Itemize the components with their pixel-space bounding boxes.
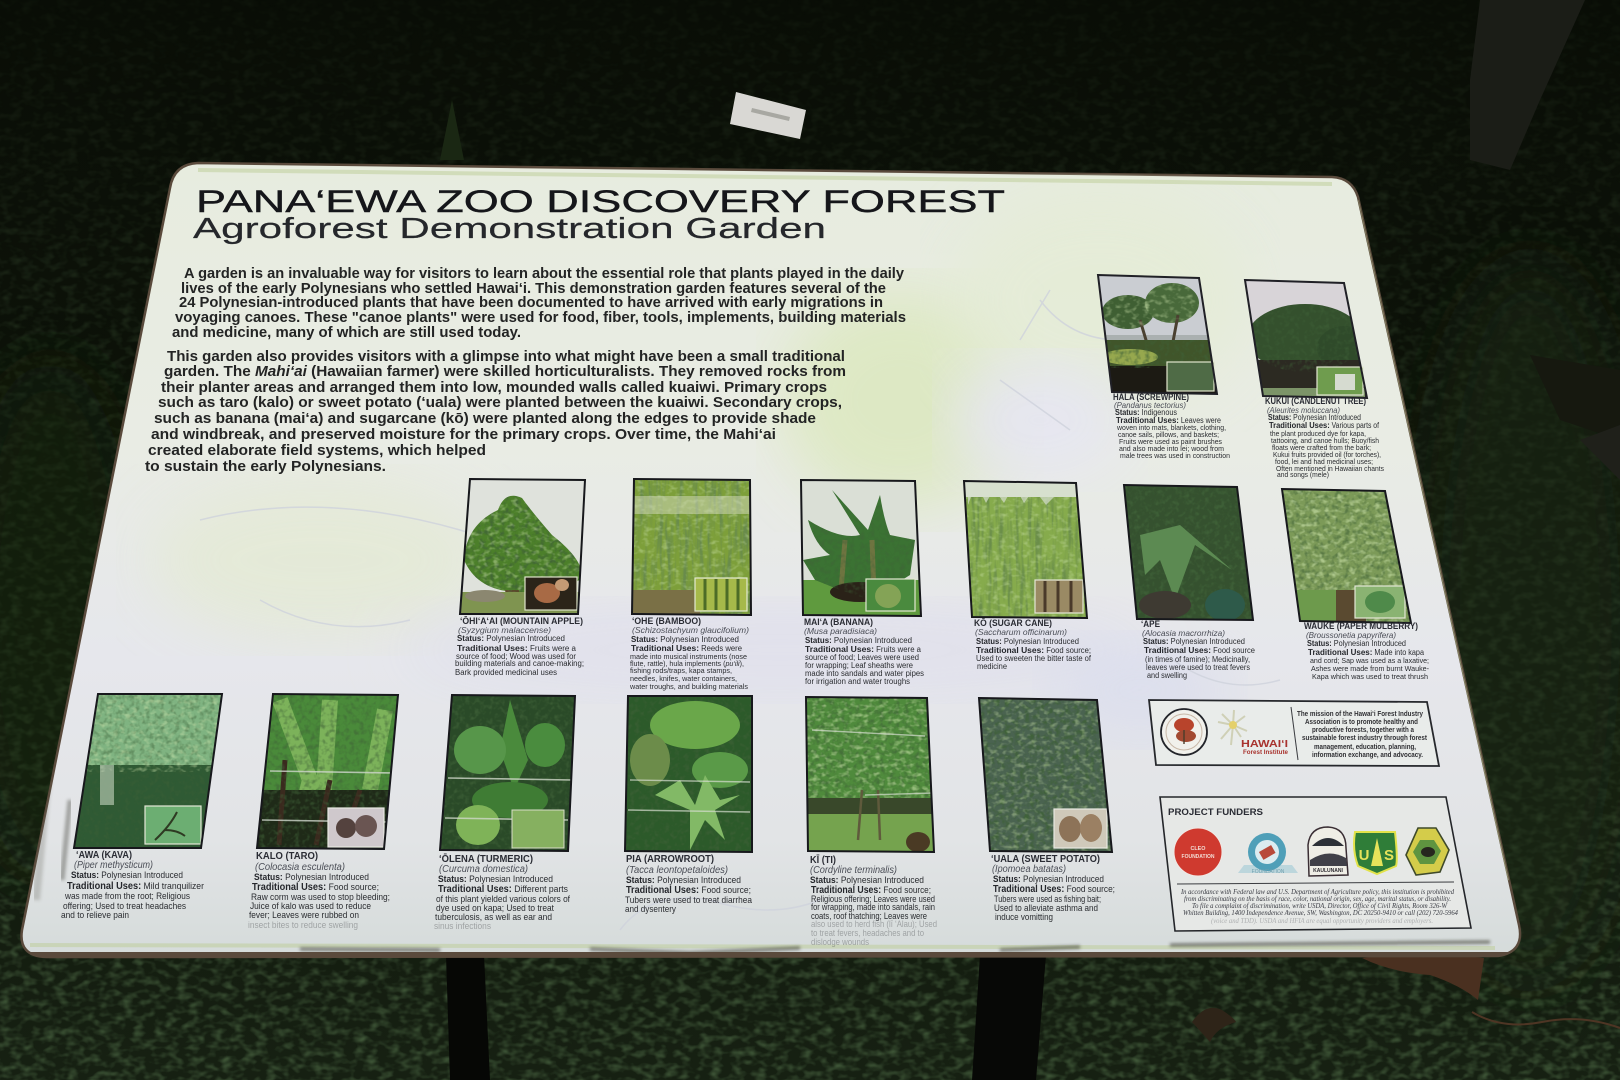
label: maia: for irrigation and water troughs [805, 677, 910, 686]
label: hala: male trees was used in construction [1120, 451, 1230, 460]
label: ko: Used to sweeten the bitter taste of [976, 654, 1092, 663]
label: hala: HALA (SCREWPINE) [1113, 392, 1189, 402]
subtitle: Agroforest Demonstration Garden [193, 213, 826, 245]
intro text block paragraph 2: their planter areas and arranged them into low, mounded walls called kuaiwi. Primary crops [161, 380, 827, 396]
panel: kalo [248, 692, 402, 930]
label: ohe [629, 616, 749, 691]
label: ko: Traditional Uses: Food source; [976, 645, 1091, 655]
logo: kaulunani: KAULUNANI [1313, 868, 1343, 874]
inset: bananas [866, 579, 915, 611]
inset: kukui nuts [1317, 367, 1363, 395]
inset: bamboo culms [695, 578, 747, 611]
label: awa: Traditional Uses: Mild tranquilizer [67, 880, 204, 892]
intro text block paragraph 2: created elaborate field systems, which helped [148, 443, 486, 459]
label: maia [804, 617, 924, 686]
label: wauke: (Broussonetia papyrifera) [1306, 630, 1396, 640]
photo: sweet potato vine [975, 696, 1115, 854]
label: awa: offering; Used to treat headaches [63, 900, 186, 911]
label: kalo: fever; Leaves were rubbed on [249, 909, 359, 920]
label: kalo: Traditional Uses: Food source; [252, 881, 379, 893]
label: ohe: Status: Polynesian Introduced [631, 635, 739, 644]
label: awa: was made from the root; Religious [64, 890, 190, 901]
mission statement text [1297, 709, 1427, 759]
label: kalo: insect bites to reduce swelling [248, 919, 358, 930]
panel: pia [622, 694, 756, 914]
intro text block paragraph 1: lives of the early Polynesians who settled Hawai‘i. This demonstration garden features several of the [181, 281, 886, 297]
equal opportunity statement [1180, 887, 1458, 925]
label: olena: Status: Polynesian Introduced [438, 873, 553, 884]
label: ki: Traditional Uses: Food source; [811, 884, 931, 896]
label: uala: (Ipomoea batatas) [992, 864, 1066, 875]
label: hala: Fruits were used as paint brushes [1119, 437, 1222, 446]
label: pia: Status: Polynesian Introduced [626, 874, 741, 885]
equal opportunity statement: To file a complaint of discrimination, write USDA, Director, Office of Civil Rights, Room 326-W [1192, 901, 1448, 910]
label: kalo: (Colocasia esculenta) [255, 862, 345, 873]
label: maia: made into sandals and water pipes [805, 669, 924, 678]
label: ape: Status: Polynesian Introduced [1143, 637, 1245, 646]
label: uala: ‘UALA (SWEET POTATO) [991, 853, 1100, 865]
panel: uala [975, 696, 1115, 922]
label: ki: dislodge wounds [811, 936, 869, 947]
mission statement text: Association is to promote healthy and [1305, 717, 1418, 726]
label: wauke: and cord; Sap was used as a laxative; [1310, 656, 1429, 665]
logo: captain planet foundation: FOUNDATION [1252, 869, 1285, 875]
label: olena [434, 853, 570, 931]
photo: bamboo [630, 477, 755, 617]
label: kalo: Juice of kalo was used to reduce [250, 900, 371, 911]
intro text block paragraph 1: voyaging canoes. These "canoe plants" were used for food, fiber, tools, implements, building materials [175, 310, 906, 326]
intro text block paragraph 2: such as banana (mai‘a) and sugarcane (kō) were planted along the edges to provide shade [154, 411, 816, 427]
label: hala: canoe sails, pillows, and baskets; [1118, 430, 1219, 439]
plant tag in background [730, 92, 806, 139]
label: awa: and to relieve pain [61, 909, 129, 920]
label: ki: to treat fevers, headaches and to [811, 927, 924, 938]
photo: kukui tree [1243, 278, 1373, 400]
label: ko: (Saccharum officinarum) [975, 627, 1067, 637]
logo: cleo foundation: CLEO [1191, 846, 1205, 852]
label: ohe: made into musical instruments (nose [630, 652, 747, 661]
label: pia: Traditional Uses: Food source; [626, 884, 751, 896]
label: olena: of this plant yielded various colors of [436, 893, 570, 904]
sign panel [20, 163, 1520, 958]
label: ohe: ‘OHE (BAMBOO) [632, 616, 701, 626]
label: kukui: the plant produced dye for kapa, [1270, 429, 1366, 438]
label: ko: Status: Polynesian Introduced [976, 637, 1079, 646]
label: kukui: (Aleurites moluccana) [1267, 405, 1340, 415]
intro text block paragraph 2: such as taro (kalo) or sweet potato (‘uala) were planted between the kuaiwi. Secondary crops, [158, 395, 842, 411]
photo: ape leaves [1120, 483, 1256, 623]
label: ohe: water troughs, and building materials [629, 682, 748, 691]
intro text block paragraph 1: 24 Polynesian-introduced plants that have been documented to have arrived with early migrations in [179, 295, 883, 311]
panel: maia [800, 477, 925, 686]
label: awa: (Piper methysticum) [74, 860, 153, 871]
label: ape: and swelling [1147, 671, 1187, 680]
label: kukui: floats were crafted from the bark; [1272, 443, 1371, 452]
label: ohe: fishing rods/traps, kapa stamps, [630, 666, 732, 675]
label: kukui: food, lei and had medicinal uses; [1275, 457, 1373, 466]
label: kalo: Status: Polynesian Introduced [254, 871, 369, 882]
intro text block paragraph 1: and medicine, many of which are still used today. [172, 325, 521, 341]
label: wauke: Ashes were made from burnt Wauke- [1311, 664, 1430, 673]
inset: cane stalks [1035, 580, 1083, 613]
label: olena: ‘ŌLENA (TURMERIC) [439, 853, 533, 865]
label: pia: (Tacca leontopetaloides) [626, 865, 728, 876]
photo: kava plant [70, 692, 225, 850]
label: ki [810, 854, 937, 947]
label: awa: Status: Polynesian Introduced [71, 869, 183, 880]
photo: ti plant [802, 695, 938, 854]
label: wauke: Status: Polynesian Introduced [1307, 639, 1406, 648]
label: ki: (Cordyline terminalis) [810, 865, 897, 876]
equal opportunity statement: from discriminating on the basis of race, color, national origin, sex, age, marital status, or disability. [1184, 894, 1451, 903]
label: hala: and also made into lei; wood from [1119, 444, 1224, 453]
intro text block paragraph 2: to sustain the early Polynesians. [145, 459, 386, 475]
intro text block paragraph 2: garden. The Mahi‘ai (Hawaiian farmer) were skilled horticulturalists. They removed rocks from [164, 364, 846, 380]
panel: awa [61, 692, 225, 920]
label: ohia ai: Status: Polynesian Introduced [457, 634, 565, 643]
logo: us forest service [1354, 832, 1397, 874]
inset: turmeric leaves [512, 810, 564, 848]
label: uala [991, 853, 1115, 922]
panel: hala [1095, 272, 1230, 460]
photo: banana plant [800, 477, 925, 618]
panel: ohia ai [455, 477, 588, 677]
intro text block paragraph 1 [172, 266, 906, 341]
panel: hawai'i forest industry association mission [1149, 700, 1439, 766]
mission statement text: management, education, planning, [1314, 742, 1416, 751]
logo: hawaii forestry agency [1406, 828, 1449, 875]
label: wauke: WAUKE (PAPER MULBERRY) [1304, 621, 1418, 631]
heading: project funders: PROJECT FUNDERS [1168, 807, 1263, 817]
label: olena: tuberculosis, as well as ear and [435, 911, 552, 922]
label: ki: KĪ (TI) [810, 854, 836, 866]
label: kukui: Status: Polynesian Introduced [1268, 413, 1361, 422]
label: uala: Traditional Uses: Food source; [993, 883, 1115, 895]
label: ohia ai [455, 616, 584, 677]
logo: captain planet foundation [1238, 833, 1298, 875]
label: maia: source of food; Leaves were used [805, 653, 919, 662]
panel: project funders [1160, 797, 1471, 931]
sign posts [446, 955, 1046, 1080]
label: kukui: and songs (mele) [1277, 470, 1329, 479]
panel: wauke [1280, 487, 1430, 681]
label: hala: woven into mats, blankets, clothing, [1116, 423, 1226, 432]
photo: taro plant [250, 692, 402, 852]
panel: ohe [629, 477, 755, 691]
green algae and grime on edges [30, 170, 1510, 948]
label: kalo [248, 850, 390, 930]
label: kukui [1265, 396, 1384, 479]
label: ki: coats, roof thatching; Leaves were [811, 910, 927, 921]
panel: kukui [1243, 278, 1384, 479]
inset: mountain apple fruit [525, 577, 577, 610]
logo: hawaii forest institute [1241, 738, 1289, 756]
label: wauke: Traditional Uses: Made into kapa [1308, 647, 1425, 657]
label: uala: induce vomitting [995, 911, 1053, 922]
inset: wauke leaves [1355, 586, 1405, 618]
inset: taro corms [328, 808, 384, 847]
mission statement text: The mission of the Hawai‘i Forest Industry [1297, 709, 1424, 718]
logo: hawaii forest institute: HAWAI‘I [1241, 738, 1288, 750]
logo: cleo foundation [1174, 828, 1222, 876]
label: pia: and dysentery [625, 903, 676, 914]
mission statement text: information exchange, and advocacy. [1312, 750, 1423, 759]
label: olena: (Curcuma domestica) [439, 864, 528, 875]
logo: hawaii forest institute: Forest Institute [1243, 750, 1289, 756]
panel: ki [802, 695, 938, 947]
label: awa [61, 849, 204, 920]
label: ohe: flute, rattle), hula implements (pu‘ili), [630, 659, 744, 668]
photo: paper mulberry [1280, 487, 1414, 625]
label: kalo: Raw corm was used to stop bleeding; [251, 891, 390, 902]
label: hala: Status: Indigenous [1115, 408, 1177, 417]
label: ape: leaves were used to treat fevers [1146, 663, 1250, 672]
label: ohia ai: source of food; Wood was used for [456, 652, 576, 661]
label: olena: Traditional Uses: Different parts [438, 883, 568, 895]
panel: olena [434, 693, 578, 931]
label: kukui: Traditional Uses: Various parts of [1269, 420, 1380, 430]
label: ki: Status: Polynesian Introduced [810, 874, 924, 885]
label: ape: ‘APE [1141, 619, 1160, 629]
photo: turmeric [436, 693, 578, 853]
label: ko [974, 618, 1092, 671]
label: maia: (Musa paradisiaca) [804, 626, 877, 636]
equal opportunity statement: Whitten Building, 1400 Independence Avenue, SW, Washington, DC 20250-9410 or call (202) 720-5964 [1183, 908, 1458, 917]
label: maia: MAI‘A (BANANA) [804, 617, 873, 627]
photo: mountain apple tree [458, 477, 588, 617]
label: kukui: Kukui fruits provided oil (for torches), [1273, 450, 1381, 459]
mission statement text: sustainable forest industry through forest [1302, 733, 1427, 742]
label: maia: Status: Polynesian Introduced [805, 636, 912, 645]
label: ko: KŌ (SUGAR CANE) [974, 618, 1052, 628]
photo: arrowroot [622, 694, 756, 854]
intro text block paragraph 2: and windbreak, and preserved moisture for the primary crops. Over time, the Mahi‘ai [151, 427, 776, 443]
label: ki: for wrapping, made into sandals, rain [811, 901, 935, 912]
label: ape: (in times of famine); Medicinally, [1145, 655, 1250, 664]
mission statement text: productive forests, together with a [1312, 725, 1415, 734]
intro text block paragraph 2: This garden also provides visitors with a glimpse into what might have been a small traditional [167, 349, 845, 365]
label: wauke [1304, 621, 1430, 681]
label: pia: PIA (ARROWROOT) [626, 853, 714, 865]
photo: hala tree [1095, 272, 1220, 398]
label: uala: Used to alleviate asthma and [994, 902, 1098, 913]
logo: cleo foundation: FOUNDATION [1182, 854, 1215, 860]
label: pia [625, 853, 753, 914]
intro text block paragraph 1: A garden is an invaluable way for visitors to learn about the essential role that plants played in the daily [184, 266, 905, 282]
equal opportunity statement: In accordance with Federal law and U.S. Department of Agriculture policy, this institution is prohibited [1180, 887, 1454, 896]
logo: us forest service: U [1359, 847, 1369, 864]
label: ohe: (Schizostachyum glaucifolium) [632, 625, 749, 635]
photo: sugar cane [960, 479, 1090, 621]
label: pia: Tubers were used to treat diarrhea [625, 894, 753, 905]
label: awa: ‘AWA (KAVA) [76, 849, 132, 861]
label: ohe: needles, knifes, water containers, [630, 674, 737, 683]
label: kalo: KALO (TARO) [256, 850, 318, 862]
label: ape: (Alocasia macrorrhiza) [1142, 628, 1225, 638]
label: wauke: Kapa which was used to treat thrush [1312, 672, 1428, 681]
label: ohia ai: Bark provided medicinal uses [455, 668, 557, 677]
label: ape [1141, 619, 1255, 680]
label: ape: Traditional Uses: Food source [1144, 645, 1255, 655]
label: uala: Tubers were used as fishing bait; [994, 893, 1101, 904]
icon: hawaii forest industry seal [1161, 709, 1207, 755]
dead leaves on the ground [1192, 954, 1620, 1042]
label: olena: sinus infections [434, 920, 491, 931]
panel: ko [960, 479, 1092, 671]
label: hala [1113, 392, 1230, 460]
label: hala: (Pandanus tectorius) [1114, 400, 1186, 410]
logo: us forest service: S [1384, 847, 1394, 864]
equal opportunity statement: (voice and TDD). USDA and HFIA are equal opportunity providers and employers. [1211, 916, 1433, 925]
label: ohe: Traditional Uses: Reeds were [631, 643, 742, 653]
label: olena: dye used on kapa; Used to treat [436, 902, 554, 913]
icon: hawaii forest institute flower [1218, 710, 1247, 745]
label: ohia ai: (Syzygium malaccense) [458, 625, 551, 635]
label: kukui: tattooing, and canoe hulls; Buoy/fish [1271, 436, 1379, 445]
label: ko: medicine [977, 662, 1007, 671]
label: maia: for wrapping; Leaf sheaths were [805, 661, 913, 670]
inset: hala leaves [1167, 362, 1214, 391]
panel: ape [1120, 483, 1256, 680]
label: ohia ai: ‘ŌHI‘A‘AI (MOUNTAIN APPLE) [460, 616, 583, 626]
label: ohia ai: Traditional Uses: Fruits were a [457, 643, 577, 653]
label: ki: Religious offering; Leaves were used [811, 893, 935, 904]
label: kukui: KUKUI (CANDLENUT TREE) [1265, 396, 1366, 406]
logo: kaulunani [1308, 827, 1348, 876]
label: uala: Status: Polynesian Introduced [993, 873, 1104, 884]
title: PANA‘EWA ZOO DISCOVERY FOREST [196, 183, 1005, 219]
label: kukui: Often mentioned in Hawaiian chants [1276, 464, 1384, 473]
intro text block paragraph 2 [145, 349, 846, 475]
inset: sweet potatoes [1054, 809, 1107, 848]
inset: kava leaf [145, 806, 201, 844]
label: ki: also used to herd fish (lī ‘Alau); Used [811, 918, 937, 929]
label: maia: Traditional Uses: Fruits were a [805, 644, 922, 654]
label: hala: Traditional Uses: Leaves were [1116, 415, 1221, 425]
label: ohia ai: building materials and canoe-making; [455, 659, 584, 668]
